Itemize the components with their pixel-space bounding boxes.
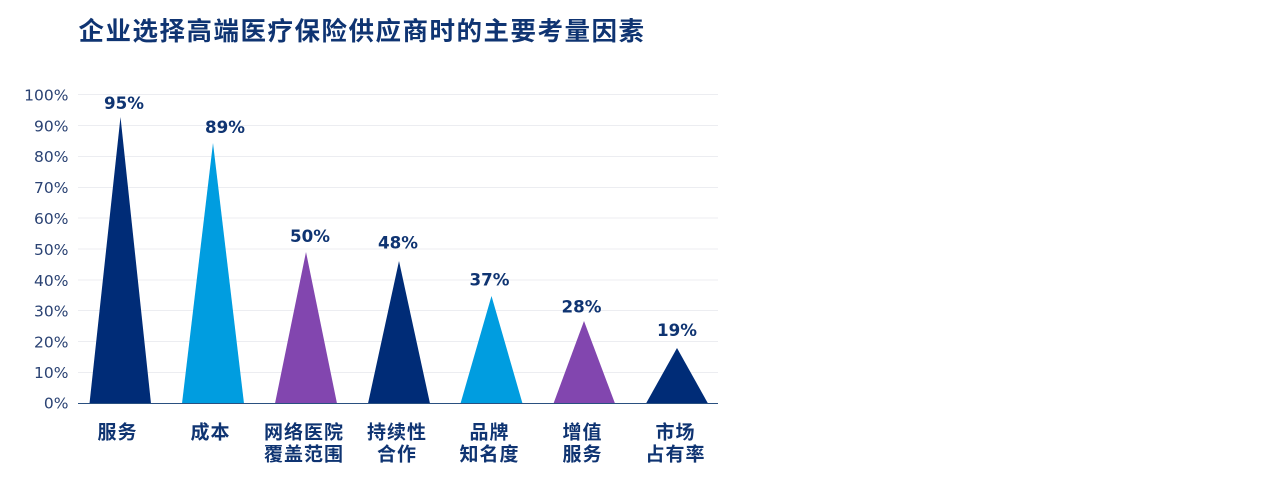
y axis labels: 100%: [24, 86, 68, 104]
bar: 网络医院覆盖范围 50%: [264, 226, 344, 466]
bar: 持续性合作 48%: 48%: [378, 232, 418, 252]
y axis labels: [24, 86, 68, 412]
bar: 增值服务 28%: 增值: [562, 422, 603, 444]
bar: 服务 95%: [90, 93, 151, 444]
bar: 市场占有率 19%: [645, 320, 708, 466]
bar: 持续性合作 48%: [367, 232, 430, 466]
y axis labels: 50%: [34, 241, 68, 259]
bar: 网络医院覆盖范围 50%: 网络医院: [264, 420, 344, 444]
bar: 增值服务 28%: 服务: [562, 444, 603, 466]
bar: 市场占有率 19%: 市场: [655, 420, 696, 444]
bar: 网络医院覆盖范围 50%: 覆盖范围: [264, 444, 344, 466]
bar: 持续性合作 48%: 持续性: [367, 422, 427, 444]
x axis baseline: [78, 402, 718, 404]
bar: 市场占有率 19%: 占有率: [645, 444, 706, 466]
bar: 品牌知名度 37%: 37%: [470, 270, 510, 290]
bar: 服务 95%: 95%: [104, 93, 144, 113]
y axis labels: 80%: [34, 148, 68, 166]
bar: 成本 89%: 成本: [190, 420, 231, 444]
y axis labels: 40%: [34, 272, 68, 290]
bar: 品牌知名度 37%: [459, 270, 522, 466]
bar: 成本 89%: 89%: [205, 117, 245, 137]
y axis labels: 20%: [34, 334, 68, 352]
y axis labels: 10%: [34, 364, 68, 382]
bar chart: [24, 86, 718, 466]
bar: 品牌知名度 37%: 品牌: [469, 422, 510, 444]
y axis labels: 70%: [34, 179, 68, 197]
bar: 持续性合作 48%: 合作: [377, 444, 417, 466]
y axis labels: 60%: [34, 210, 68, 228]
bar: 市场占有率 19%: 19%: [657, 320, 697, 340]
bar: 增值服务 28%: [554, 296, 615, 466]
y axis labels: 30%: [34, 302, 68, 320]
bar: 增值服务 28%: 28%: [562, 296, 602, 316]
title: 企业选择高端医疗保险供应商时的主要考量因素: [78, 17, 646, 46]
y axis labels: 90%: [34, 118, 68, 136]
bar: 成本 89%: [182, 117, 245, 444]
bar: 品牌知名度 37%: 知名度: [459, 442, 520, 466]
y axis labels: 0%: [44, 394, 68, 412]
bar: 服务 95%: 服务: [97, 422, 138, 444]
bar: 网络医院覆盖范围 50%: 50%: [290, 226, 330, 246]
